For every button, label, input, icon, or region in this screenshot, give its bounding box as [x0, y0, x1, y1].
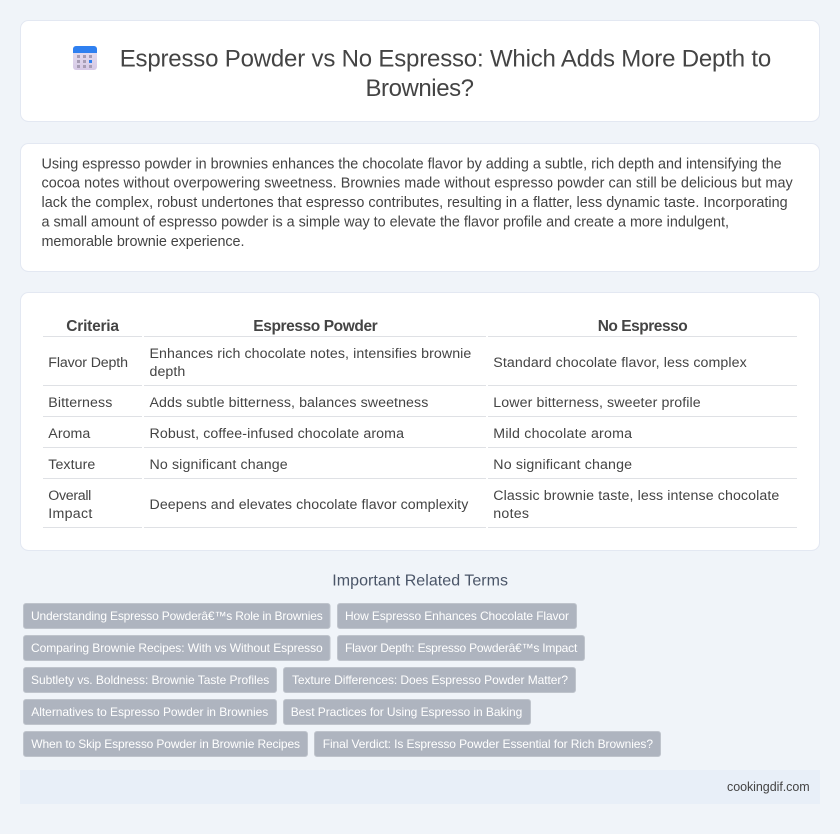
- tag: [24, 636, 330, 660]
- tag: Alternatives to Espresso Powder in Brownies: [31, 705, 268, 719]
- row: aroma: Robust, coffee-infused chocolate aroma: [150, 426, 404, 442]
- row: texture: No significant change: [493, 457, 632, 473]
- tag: [24, 732, 308, 756]
- row: aroma: Mild chocolate aroma: [493, 426, 632, 442]
- intro paragraph: [42, 156, 793, 250]
- intro paragraph: cocoa notes without overpowering sweetness. Brownies made without espresso powder can still be delicious but may: [42, 176, 793, 192]
- row: bitterness: Lower bitterness, sweeter profile: [493, 395, 701, 411]
- footer source: cookingdif.com: [727, 780, 810, 794]
- tag: Final Verdict: Is Espresso Powder Essential for Rich Brownies?: [323, 737, 653, 751]
- row: overall impact: Overall: [48, 488, 91, 504]
- header card: [20, 20, 820, 122]
- tag: Texture Differences: Does Espresso Powder Matter?: [292, 673, 568, 687]
- row: texture: Texture: [48, 457, 95, 473]
- row: texture: No significant change: [150, 457, 288, 473]
- intro paragraph: a small amount of espresso powder is a simple way to elevate the flavor profile and create a more indulgent,: [42, 215, 729, 231]
- tag: [24, 668, 276, 692]
- intro paragraph card: [20, 144, 820, 272]
- row: overall impact: Impact: [48, 506, 92, 522]
- intro paragraph: memorable brownie experience.: [42, 234, 244, 250]
- comparison table card: [20, 292, 820, 550]
- row: flavor depth: Standard chocolate flavor, less complex: [493, 355, 747, 371]
- row: overall impact: [48, 488, 779, 522]
- row: aroma: Aroma: [48, 426, 90, 442]
- row: bitterness: [48, 395, 701, 411]
- tag: How Espresso Enhances Chocolate Flavor: [345, 609, 569, 623]
- row: overall impact: Classic brownie taste, less intense chocolate: [493, 488, 779, 504]
- tag: [284, 700, 530, 724]
- table header row: Espresso Powder: [253, 318, 378, 335]
- tag: [24, 700, 276, 724]
- related terms heading: Important Related Terms: [332, 573, 508, 590]
- tag: [338, 636, 584, 660]
- tag: When to Skip Espresso Powder in Brownie Recipes: [31, 737, 300, 751]
- row: bitterness: Adds subtle bitterness, balances sweetness: [150, 395, 428, 411]
- row: flavor depth: Flavor Depth: [48, 355, 128, 371]
- row: aroma: [48, 426, 632, 442]
- row: texture: [48, 457, 632, 473]
- table header row: [66, 318, 688, 335]
- intro paragraph: lack the complex, robust undertones that espresso contributes, resulting in a flatter, less dynamic taste. Incorporating: [42, 195, 788, 211]
- table header row: Criteria: [66, 318, 119, 335]
- intro paragraph: Using espresso powder in brownies enhances the chocolate flavor by adding a subtle, rich depth and intensifying the: [42, 156, 782, 172]
- tag: [284, 668, 576, 692]
- row: flavor depth: depth: [150, 364, 185, 380]
- row: flavor depth: Enhances rich chocolate notes, intensifies brownie: [150, 346, 471, 362]
- title: Espresso Powder vs No Espresso: Which Adds More Depth to: [120, 46, 771, 73]
- footer bar: [20, 770, 820, 804]
- icon: calendar: [73, 46, 97, 70]
- row: bitterness: Bitterness: [48, 395, 112, 411]
- row: overall impact: Deepens and elevates chocolate flavor complexity: [150, 497, 469, 513]
- tag: Subtlety vs. Boldness: Brownie Taste Profiles: [31, 673, 269, 687]
- tag: Best Practices for Using Espresso in Baking: [291, 705, 522, 719]
- tag: [338, 604, 576, 628]
- tag: Comparing Brownie Recipes: With vs Without Espresso: [31, 641, 323, 655]
- title: [120, 46, 771, 102]
- tag: [24, 604, 330, 628]
- related terms tags: [24, 604, 660, 756]
- title: Brownies?: [366, 75, 474, 102]
- tag: [314, 732, 660, 756]
- tag: Understanding Espresso Powderâ€™s Role in Brownies: [31, 609, 323, 623]
- table header row: No Espresso: [598, 318, 688, 335]
- tag: Flavor Depth: Espresso Powderâ€™s Impact: [345, 641, 578, 655]
- row: overall impact: notes: [493, 506, 529, 522]
- row: flavor depth: [48, 346, 747, 380]
